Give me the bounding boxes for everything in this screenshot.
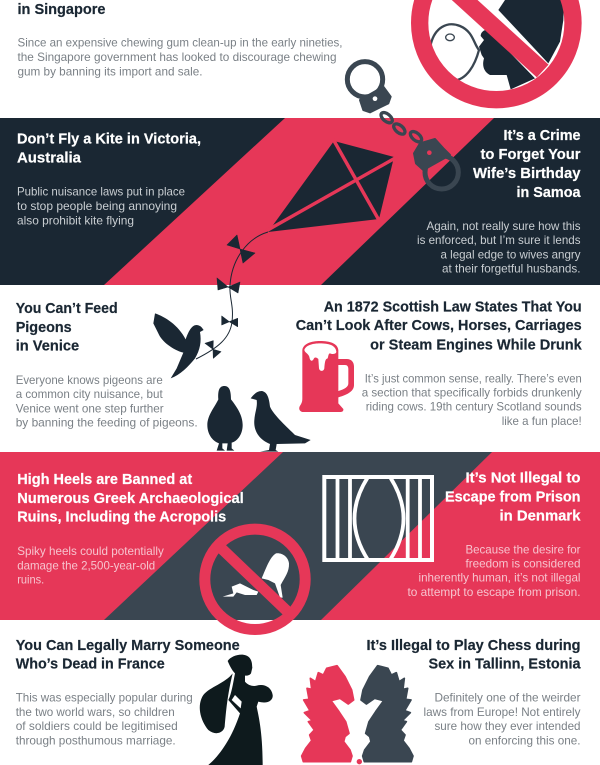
text block: Venice (16, 373, 198, 430)
text block: Victoria: also prohibit kite flying (17, 214, 134, 228)
heading: Scottish law: An 1872 Scottish Law States That You (324, 299, 582, 316)
heading: chewing gum in Singapore: in Singapore (18, 1, 106, 18)
heading: chess in Tallinn: It’s Illegal to Play Chess during (366, 637, 580, 654)
heading: escape from prison in Denmark: in Denmark (500, 508, 581, 525)
text block: Denmark: to attempt to escape from prison. (408, 585, 580, 599)
text block: Samoa: is enforced, but I’m sure it lends (417, 233, 580, 247)
text block: France: through posthumous marriage. (16, 733, 176, 747)
icon: beer mug (299, 341, 354, 412)
panel: Greece and Denmark red band (0, 452, 600, 620)
heading: wife's birthday in Samoa: in Samoa (516, 184, 581, 201)
heading: pigeons in Venice: in Venice (16, 338, 79, 355)
icon: kite (266, 139, 397, 232)
text block: Greece (17, 544, 164, 586)
heading: wife's birthday in Samoa: It’s a Crime (504, 127, 580, 144)
text block: Scotland: It’s just common sense, really. There’s even (365, 371, 582, 385)
icon: chess knights (302, 666, 413, 764)
text block: Tallinn (424, 691, 580, 747)
heading: kite in Victoria (17, 130, 201, 166)
text block: Scotland: like a fun place! (502, 414, 582, 428)
heading: Scottish law (296, 299, 582, 353)
heading: Scottish law: or Steam Engines While Drunk (370, 336, 582, 353)
text block: France (16, 691, 193, 747)
heading: kite in Victoria: Australia (17, 150, 82, 166)
heading: high heels in Greece: Numerous Greek Archaeological (17, 490, 244, 507)
heading: wife's birthday in Samoa: Wife’s Birthday (473, 165, 581, 182)
text block: Greece: Spiky heels could potentially (17, 544, 164, 558)
text block: Scotland (362, 371, 582, 428)
text block: Scotland: a section that specifically forbids drunkenly (362, 386, 582, 400)
icon: banned high heel (205, 529, 305, 630)
heading: wife's birthday in Samoa (473, 127, 581, 201)
text block: Singapore: the Singapore government has looked to discourage chewing (18, 50, 336, 64)
icon: bent prison bars (324, 477, 432, 560)
heading: escape from prison in Denmark (445, 470, 581, 525)
text block: Denmark: freedom is considered (466, 557, 580, 571)
heading: marriage in France (16, 637, 240, 673)
text block: France: of soldiers could be legitimised (16, 719, 178, 733)
text block: Tallinn: on enforcing this one. (468, 733, 580, 747)
text block: Denmark: Because the desire for (466, 542, 580, 556)
heading: high heels in Greece (17, 471, 244, 526)
icon: bride silhouette (200, 655, 273, 765)
heading: high heels in Greece: High Heels are Banned at (17, 471, 192, 488)
text block: Venice: by banning the feeding of pigeons. (16, 416, 198, 430)
heading: escape from prison in Denmark: It’s Not Illegal to (466, 470, 580, 487)
text block: Venice: a common city nuisance, but (16, 387, 163, 401)
heading: marriage in France: You Can Legally Marry Someone (16, 637, 240, 654)
text block: Singapore: Since an expensive chewing gum clean-up in the early nineties, (18, 36, 342, 50)
heading: chess in Tallinn: Sex in Tallinn, Estonia (428, 656, 581, 673)
text block: France: This was especially popular during (16, 691, 193, 705)
text block: Greece: damage the 2,500-year-old (17, 558, 155, 572)
text block: Tallinn: laws from Europe! Not entirely (424, 705, 580, 719)
text block: Venice: Venice went one step further (16, 402, 164, 416)
text block: Victoria (17, 185, 185, 228)
text block: Samoa: at their forgetful husbands. (442, 262, 580, 276)
text block: France: the two world wars, so children (16, 705, 175, 719)
text block: Samoa: a legal edge to wives angry (440, 248, 580, 262)
heading: escape from prison in Denmark: Escape from Prison (445, 489, 580, 506)
icon: pigeons (153, 313, 311, 452)
icon: handcuffs (347, 62, 458, 189)
text block: Greece: ruins. (17, 572, 44, 586)
text block: Samoa: Again, not really sure how this (426, 219, 580, 233)
text block: Samoa (417, 219, 580, 276)
text block: Venice: Everyone knows pigeons are (16, 373, 163, 387)
heading: wife's birthday in Samoa: to Forget Your (480, 146, 581, 163)
panel: Victoria and Samoa dark band (0, 118, 600, 285)
heading: pigeons in Venice (16, 300, 118, 355)
heading: kite in Victoria: Don’t Fly a Kite in Victoria, (17, 130, 201, 148)
heading: Scottish law: Can’t Look After Cows, Horses, Carriages (296, 317, 582, 334)
heading: high heels in Greece: Ruins, Including the Acropolis (17, 509, 226, 526)
icon: kite tail with bows (196, 232, 268, 359)
text block: Victoria: to stop people being annoying (17, 199, 177, 213)
icon: banned bubble gum (420, 0, 573, 100)
text block: Denmark: inherently human, it’s not illegal (418, 571, 580, 585)
heading: pigeons in Venice: Pigeons (16, 319, 72, 336)
text block: Victoria: Public nuisance laws put in place (17, 185, 185, 199)
text block: Singapore: gum by banning its import and sale. (18, 64, 202, 78)
heading: marriage in France: Who’s Dead in France (16, 656, 165, 673)
text block: Denmark (408, 542, 580, 599)
heading: chess in Tallinn (366, 637, 581, 673)
text block: Scotland: riding cows. 19th century Scotland sounds (366, 400, 582, 414)
heading: pigeons in Venice: You Can’t Feed (16, 300, 118, 317)
text block: Tallinn: Definitely one of the weirder (434, 691, 580, 705)
text block: Tallinn: sure how they ever intended (434, 719, 580, 733)
text block: Singapore (18, 36, 342, 78)
